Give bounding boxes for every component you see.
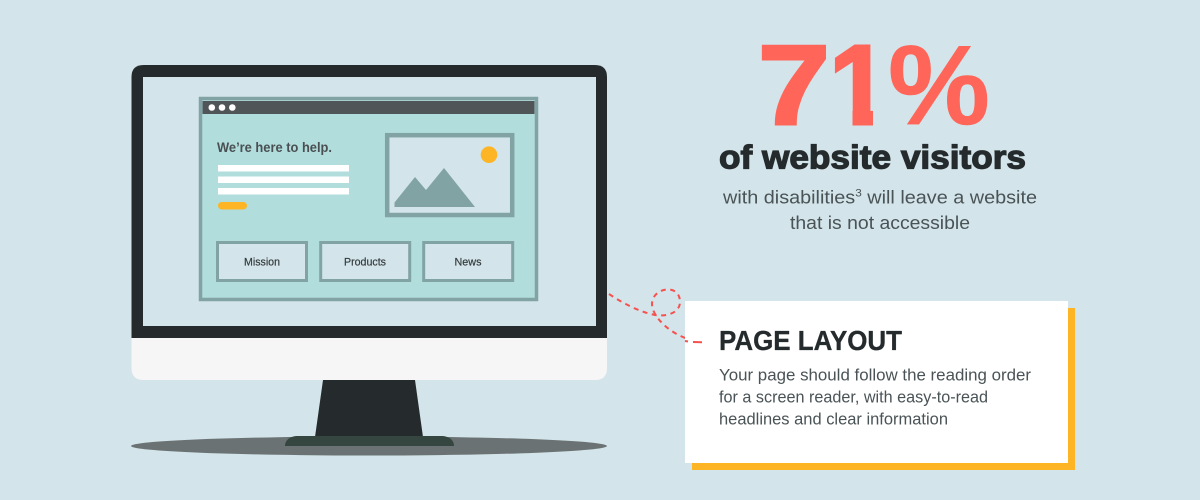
statistic: 71%: %: [888, 22, 990, 148]
button: Products: Products: [344, 256, 386, 268]
monitor screen: [143, 77, 596, 326]
statistic description: with disabilities: [723, 186, 846, 208]
subheading: of website visitors: of website visitors: [719, 138, 1026, 176]
monitor shadow: [131, 436, 607, 456]
icon: mountains: [394, 168, 475, 207]
button: News: News: [454, 256, 482, 268]
statistic description: will leave a website: [862, 186, 1037, 208]
image frame: [387, 135, 512, 215]
statistic description: [722, 186, 1037, 233]
callout body: [719, 366, 1031, 428]
browser window: [200, 98, 536, 300]
monitor bezel: [132, 65, 607, 338]
infographic canvas: [131, 44, 1075, 470]
statistic description: that is not accessible: [790, 212, 970, 233]
callout heading: PAGE LAYOUT: [719, 325, 902, 356]
placeholder text lines: [218, 165, 349, 194]
image placeholder: [387, 135, 512, 215]
statistic: 71%: 1: [829, 22, 889, 148]
browser frame: [200, 98, 536, 300]
monitor stand base: [285, 436, 454, 446]
dashed connector: [609, 290, 703, 342]
statistic: 71%: [762, 44, 988, 126]
page headline: We’re here to help.: [217, 140, 332, 155]
statistic description: 3: [855, 188, 862, 200]
window control dots: [208, 104, 236, 111]
connector end over card: [685, 341, 702, 342]
browser title bar: [202, 101, 534, 114]
button: Mission: Mission: [244, 256, 280, 268]
monitor stand neck: [315, 380, 423, 437]
monitor chin: [132, 338, 607, 380]
callout: page layout: [685, 301, 1075, 470]
button: Products: [321, 242, 410, 280]
button: News: [424, 242, 513, 280]
callout body: Your page should follow the reading order: [719, 366, 1031, 384]
callout body: for a screen reader, with easy-to-read: [719, 388, 988, 406]
illustration: desktop monitor: [131, 65, 607, 456]
callout body: headlines and clear information: [719, 410, 948, 428]
statistic: 71%: 7: [758, 22, 830, 148]
callout card: [685, 301, 1068, 463]
icon: sun: [481, 146, 497, 163]
callout shadow: [692, 308, 1075, 470]
button: Mission: [218, 242, 306, 280]
orange button: [218, 202, 247, 210]
